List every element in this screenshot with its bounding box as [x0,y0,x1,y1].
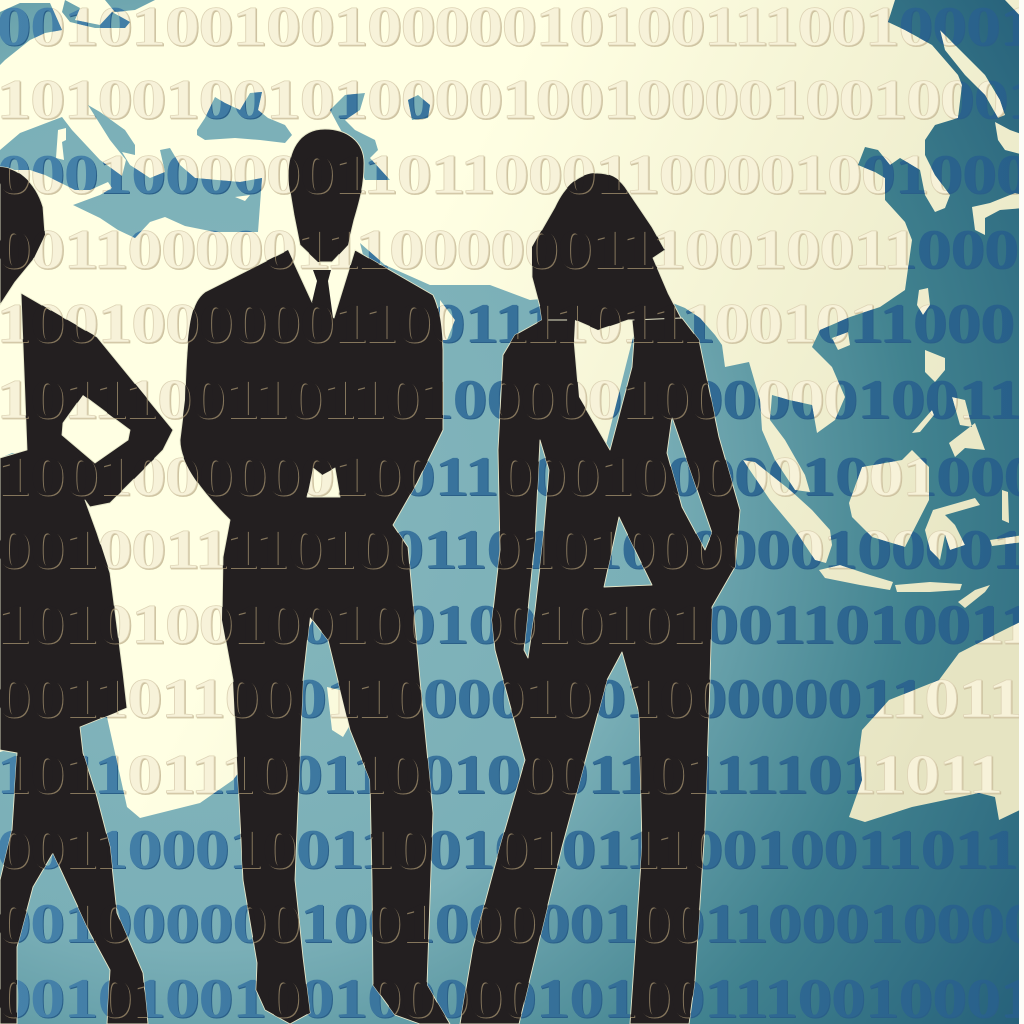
ocean with blue binary digits: 1001000000110011110111001011000 [0,293,1014,355]
ocean with blue binary digits: 1010010010100001001000010010001 [0,69,1024,131]
embossed binary digits over silhouettes: 0001000000110110001100001001000 [0,144,1024,206]
binary digits on land: 0010000001001000001001100010000 [0,893,1024,955]
embossed binary digits over silhouettes: 0011011000110000100100000011011 [0,668,1021,730]
binary digits on land: 0011011000110000100100000011011 [0,668,1021,730]
binary digits on land: 0010011110100110101000000100001 [0,519,1024,581]
embossed binary digits over silhouettes: 0010000001001000001001100010000 [0,893,1024,955]
binary digits on land: 0011000001110000001110010011000 [0,219,1017,281]
embossed binary digits over silhouettes: 1001000000110011110111001011000 [0,293,1014,355]
ocean with blue binary digits: 1011100110110100000100000010011 [0,369,1021,431]
binary digits on land: 0011000100110010101110010011011 [0,819,1017,881]
embossed binary digits over silhouettes: 1001000000100110001000001001000 [0,446,1024,508]
ocean with blue binary digits: 0011000001110000001110010011000 [0,219,1017,281]
embossed binary digits over silhouettes: 0010011110100110101000000100001 [0,519,1024,581]
ocean with blue binary digits: 0010000001001000001001100010000 [0,893,1024,955]
binary digits on land: 1011100110110100000100000010011 [0,369,1021,431]
ocean with blue binary digits: 0001000000110110001100001001000 [0,144,1024,206]
ocean with blue binary digits: 0011000100110010101110010011011 [0,819,1017,881]
embossed binary digits over silhouettes: 1011011100110010001101111011011 [0,744,1002,806]
ocean with blue binary digits: 0011011000110000100100000011011 [0,668,1021,730]
silhouette: man in suit at center [180,129,450,1024]
ocean with blue binary digits: 1010100100100100101010011010011 [0,594,1024,656]
silhouette: woman in pantsuit at right [460,173,740,1024]
ocean with blue binary digits: 1011011100110010001101111011011 [0,744,1002,806]
ocean with blue binary digits: 1001000000100110001000001001000 [0,446,1024,508]
binary digits on land: 0001000000110110001100001001000 [0,144,1024,206]
binary digits on land: 1010100100100100101010011010011 [0,594,1024,656]
ocean with blue binary digits: 0010011110100110101000000100001 [0,519,1024,581]
silhouette: woman in skirt at left [0,167,173,1024]
embossed binary digits over silhouettes: 0011000001110000001110010011000 [0,219,1017,281]
embossed binary digits over silhouettes: 1010010010100001001000010010001 [0,69,1024,131]
binary digits on land: 1010010010100001001000010010001 [0,69,1024,131]
embossed binary digits over silhouettes: 1010100100100100101010011010011 [0,594,1024,656]
embossed binary digits over silhouettes [0,156,738,1018]
embossed binary digits over silhouettes: 1011100110110100000100000010011 [0,369,1021,431]
binary digits on land: 1001000000100110001000001001000 [0,446,1024,508]
binary digits on land: 1001000000110011110111001011000 [0,293,1014,355]
binary digits on land: 1011011100110010001101111011011 [0,744,1002,806]
embossed binary digits over silhouettes: 0011000100110010101110010011011 [0,819,1017,881]
